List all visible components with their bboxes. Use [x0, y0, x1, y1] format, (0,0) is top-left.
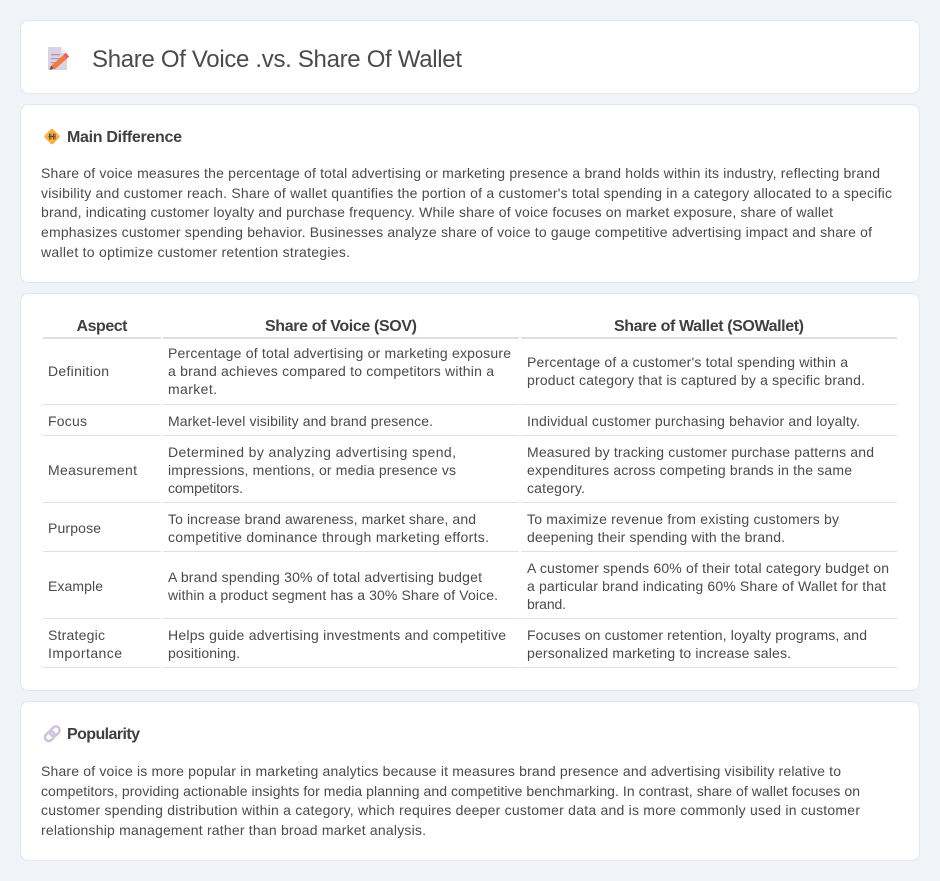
text block: main difference: emphasizes customer spending behavior. Businesses analyze share of voice to gauge competitive advertising impact and share of	[41, 224, 872, 240]
table row: strategic importance: Focuses on customer retention, loyalty programs, and	[527, 627, 867, 643]
text block: main difference: visibility and customer reach. Share of wallet quantifies the portion of a customer's total spending in a category allocated to a specific	[41, 185, 892, 201]
text block: popularity: Share of voice is more popular in marketing analytics because it measures brand presence and advertising visibility relative to	[41, 763, 841, 779]
table row: focus: Individual customer purchasing behavior and loyalty.	[527, 413, 860, 429]
table row: measurement: expenditures across competing brands in the same	[527, 462, 852, 478]
table header: Share of Wallet (SOWallet)	[614, 318, 804, 335]
table row: measurement: Measured by tracking customer purchase patterns and	[527, 444, 874, 460]
panel: main difference	[20, 104, 920, 282]
table row: example: a particular brand indicating 60% Share of Wallet for that	[527, 578, 886, 594]
text block: popularity: relationship management rather than broad market analysis.	[41, 822, 426, 838]
table row: definition: Definition	[48, 363, 109, 379]
icon: link	[43, 725, 61, 743]
table row: purpose: deepening their spending with the brand.	[527, 529, 785, 545]
panel: header	[20, 20, 920, 94]
text block: main difference: brand, indicating customer loyalty and purchase frequency. While share of voice focuses on market exposure, share of wallet	[41, 204, 833, 220]
text block: popularity: competitors, providing actionable insights for media planning and competitive benchmarking. In contrast, share of wallet focuses on	[41, 783, 860, 799]
text block: main difference: wallet to optimize customer retention strategies.	[40, 244, 350, 260]
table row: strategic importance: personalized marketing to increase sales.	[527, 645, 791, 661]
table row: measurement: impressions, mentions, or media presence vs	[168, 462, 456, 478]
table row: measurement: Determined by analyzing advertising spend,	[168, 444, 456, 460]
table row: strategic importance	[43, 627, 897, 668]
title: Share Of Voice .vs. Share Of Wallet	[92, 46, 462, 73]
table row: example	[43, 560, 897, 619]
table row: measurement: category.	[527, 480, 585, 496]
table row: measurement	[43, 444, 897, 503]
table row: example: within a product segment has a 30% Share of Voice.	[167, 587, 498, 603]
table row: purpose: Purpose	[48, 520, 101, 536]
table header: Share of Voice (SOV)	[265, 318, 417, 335]
panel: popularity	[20, 702, 920, 860]
table row: focus: Market-level visibility and brand presence.	[168, 413, 433, 429]
table row: purpose	[43, 511, 897, 552]
table row: purpose: competitive dominance through marketing efforts.	[168, 529, 489, 545]
table row: example: brand.	[527, 596, 566, 612]
table row: definition	[43, 345, 897, 405]
table row: strategic importance: positioning.	[168, 645, 240, 661]
table row: measurement: competitors.	[168, 480, 243, 496]
table header: Aspect	[76, 318, 128, 335]
table row: focus: Focus	[48, 413, 87, 429]
table row: strategic importance: Helps guide advertising investments and competitive	[168, 627, 506, 643]
table row: example: A customer spends 60% of their total category budget on	[527, 560, 889, 576]
table row: example: A brand spending 30% of total advertising budget	[168, 569, 482, 585]
table row: definition: Percentage of total advertising or marketing exposure	[168, 345, 511, 361]
heading: popularity: Popularity	[67, 726, 140, 743]
text block: popularity	[41, 763, 860, 838]
table row: definition: Percentage of a customer's total spending within a	[527, 354, 848, 370]
table row: definition: product category that is captured by a specific brand.	[527, 372, 865, 388]
table row: purpose: To increase brand awareness, market share, and	[168, 511, 476, 527]
table row: example: Example	[48, 578, 103, 594]
heading: main difference: Main Difference	[67, 129, 182, 146]
table row: purpose: To maximize revenue from existing customers by	[527, 511, 839, 527]
text block: popularity: customer spending distribution within a category, which requires deeper customer data and is more commonly used in customer	[41, 802, 860, 818]
table row: definition: a brand achieves compared to competitors within a	[168, 363, 494, 379]
table row: strategic importance: Importance	[48, 645, 122, 661]
panel: comparison table	[20, 294, 920, 690]
table row: measurement: Measurement	[48, 462, 137, 478]
table row: strategic importance: Strategic	[48, 627, 105, 643]
icon: document with pencil	[48, 47, 68, 70]
table header	[43, 318, 897, 339]
table row: definition: market.	[168, 381, 217, 397]
text block: main difference: Share of voice measures the percentage of total advertising or marketing presence a brand holds within its industry, reflecting brand	[41, 165, 880, 181]
text block: main difference	[40, 165, 892, 260]
table row: focus	[43, 413, 897, 436]
icon: orange diamond	[44, 128, 60, 145]
